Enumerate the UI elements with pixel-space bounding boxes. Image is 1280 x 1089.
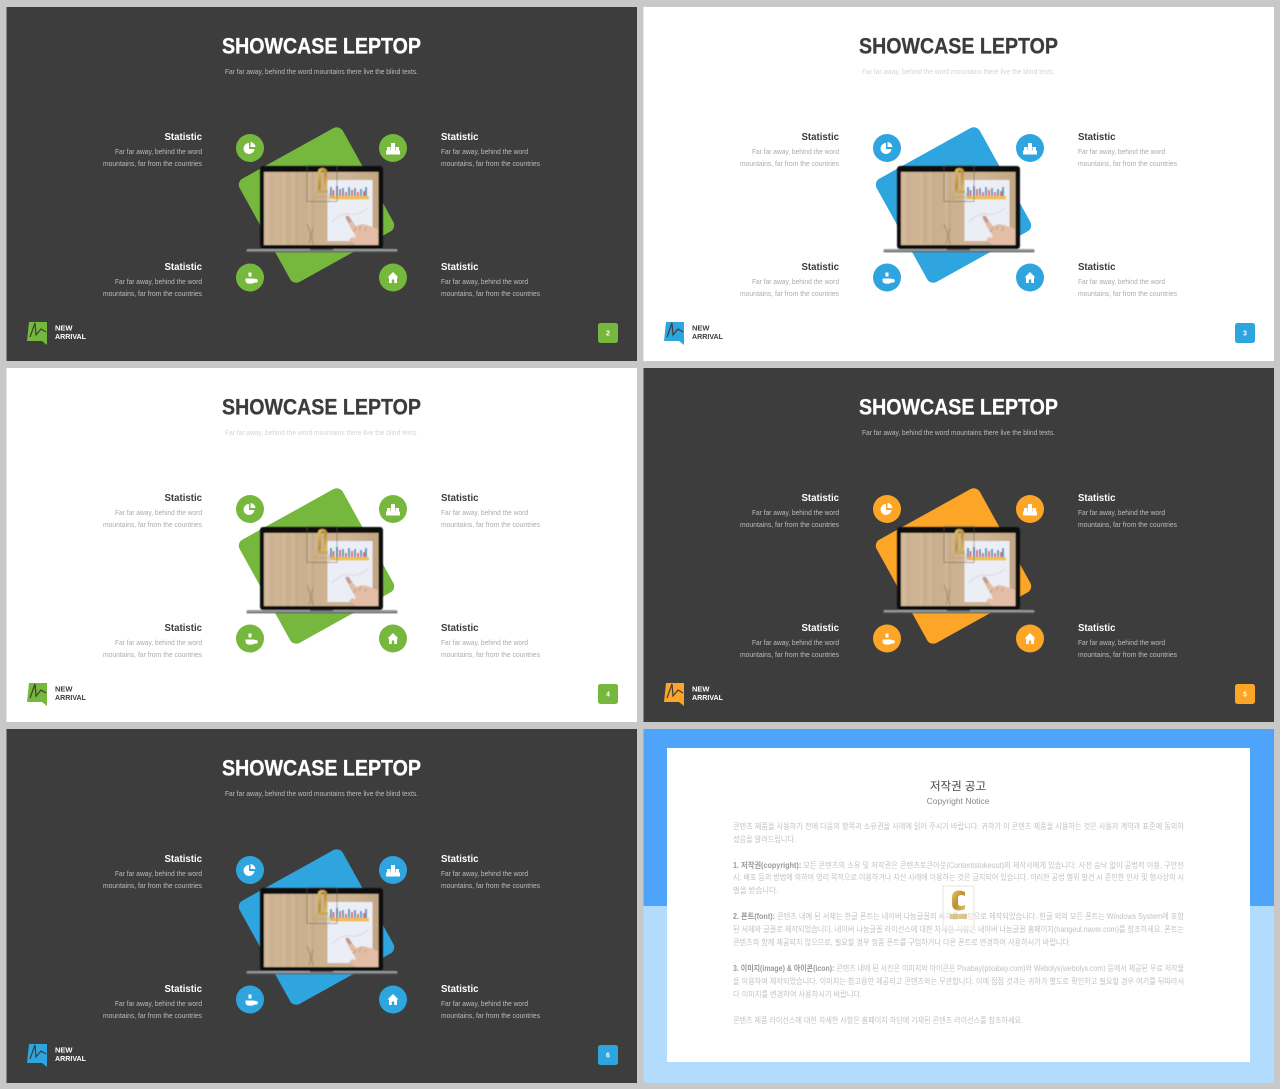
heading: copyright notice in Korean: 저작권 공고	[930, 780, 986, 793]
text block: top left statistic: Statistic	[164, 492, 202, 504]
text block: top right statistic: mountains, far from the countries	[1078, 522, 1177, 529]
panel: slide 4 white green	[6, 368, 637, 722]
subtitle: Far far away, behind the word mountains there live the blind texts.	[225, 791, 418, 798]
laptop image	[246, 526, 398, 613]
text block: image and icon clause: 다 이미지를 변경하여 사용하시기 바랍니다.	[733, 989, 862, 999]
text block: top left statistic: Far far away, behind the word	[115, 510, 202, 517]
text block: top right statistic: Statistic	[441, 492, 479, 504]
text block: bottom right statistic: Statistic	[441, 983, 479, 995]
text block: top left statistic: Far far away, behind the word	[752, 149, 839, 156]
page number: 2	[606, 330, 610, 338]
text block: license footer: 콘텐츠 제품 라이선스에 대한 자세한 사항은 홈페이지 하단에 기재된 콘텐츠 라이선스를 참조하세요.	[733, 1015, 1023, 1025]
logo	[27, 322, 86, 345]
logo: NEW	[55, 1046, 73, 1054]
text block: top left statistic: mountains, far from the countries	[103, 883, 202, 890]
watermark: gold C badge	[943, 886, 974, 930]
icon: home	[1016, 624, 1044, 652]
text block: bottom right statistic: mountains, far from the countries	[1078, 291, 1177, 298]
icon: coffee cup	[873, 264, 901, 292]
page number: 6	[606, 1052, 610, 1060]
text block: top left statistic: Statistic	[164, 131, 202, 143]
text block: copyright clause: 벌을 받습니다.	[733, 885, 778, 895]
text block: top left statistic	[103, 853, 202, 890]
text block: bottom left statistic: mountains, far from the countries	[103, 1013, 202, 1020]
text block: bottom left statistic: Far far away, behind the word	[115, 640, 202, 647]
text block: top right statistic: Far far away, behind the word	[441, 149, 528, 156]
page number	[1235, 684, 1255, 704]
icon: pie chart	[873, 495, 901, 523]
text block: top right statistic: Statistic	[1078, 131, 1116, 143]
subtitle: Far far away, behind the word mountains there live the blind texts.	[225, 430, 418, 437]
text block: bottom right statistic: mountains, far from the countries	[441, 652, 540, 659]
rotated square backdrop	[236, 486, 397, 646]
laptop image	[246, 888, 398, 974]
logo: ARRIVAL	[692, 332, 723, 341]
laptop image	[246, 166, 398, 252]
icon: home	[379, 264, 407, 292]
icon: pie chart	[236, 856, 264, 884]
text block: bottom right statistic: mountains, far from the countries	[441, 291, 540, 298]
text block: top right statistic: Far far away, behind the word	[441, 510, 528, 517]
text block: copyright clause	[733, 860, 1184, 895]
logo: NEW	[55, 324, 73, 332]
text block: bottom right statistic: mountains, far from the countries	[441, 1013, 540, 1020]
text block: top right statistic: Far far away, behind the word	[1078, 510, 1165, 517]
laptop image	[884, 166, 1034, 252]
text block: top left statistic	[103, 131, 202, 168]
text block: bottom left statistic	[103, 261, 202, 298]
text block: bottom left statistic: Statistic	[802, 261, 839, 273]
icon: pie chart	[873, 134, 901, 162]
text block: bottom left statistic: mountains, far from the countries	[740, 291, 839, 298]
text block: top left statistic: mountains, far from the countries	[740, 522, 839, 529]
logo: NEW	[55, 684, 73, 694]
text block: font clause: 콘텐츠의 함께 제공되지 않으므로, 필요할 경우 정품 폰트를 구입하거나 다른 폰트로 변경하여 사용하시기 바랍니다.	[733, 937, 1071, 947]
rotated square backdrop	[873, 486, 1034, 646]
text block: bottom right statistic	[1078, 622, 1177, 659]
text block: top left statistic: mountains, far from the countries	[103, 522, 202, 529]
icon: bar chart	[379, 134, 407, 162]
text block: introduction: 콘텐츠 제품을 사용하기 전에 다음의 항목과 소유권을 사례에 읽어 주시기 바랍니다. 귀하가 이 콘텐츠 제품을 사용하는 것은 사용자 계약과 표준에 동의하	[733, 821, 1185, 831]
text block: font clause: 2. 폰트(font): 콘텐츠 내에 된 서체는 한글 폰트는 네이버 나눔글꼴의 서체를 바탕으로 제작되었습니다. 한글 외의 모든 폰트는 Windows System에 포함	[733, 911, 1185, 921]
text block: bottom left statistic: Far far away, behind the word	[115, 1001, 202, 1008]
page number: 5	[1243, 692, 1247, 698]
logo	[664, 683, 723, 706]
icon: bar chart	[379, 495, 407, 523]
text block: top left statistic	[103, 492, 202, 529]
text block: image and icon clause: 을 이용하여 제작되었습니다. 이미지는 참고용만 제공되고 콘텐츠와는 무관합니다. 이에 점점 것과는 귀하가 별도로 확인하고 필요할 경우 여기를 뒤따라서	[733, 976, 1184, 986]
icon: coffee cup	[873, 624, 901, 652]
laptop image	[884, 526, 1034, 613]
subtitle: Far far away, behind the word mountains there live the blind texts.	[862, 430, 1055, 437]
text block: top left statistic: Statistic	[802, 131, 839, 143]
page number	[598, 1045, 618, 1065]
text block: bottom right statistic: Statistic	[1078, 622, 1116, 634]
text block: bottom left statistic	[740, 622, 839, 659]
text block: bottom left statistic: Statistic	[802, 622, 839, 634]
text block: bottom left statistic: Statistic	[164, 261, 202, 273]
text block: bottom left statistic: Statistic	[164, 622, 202, 634]
text block: bottom right statistic	[441, 622, 540, 659]
text block: top right statistic	[1078, 131, 1177, 168]
logo: ARRIVAL	[55, 1054, 86, 1063]
panel: slide 6 dark blue	[6, 729, 637, 1083]
text block: top right statistic	[441, 492, 540, 529]
text block: bottom right statistic: mountains, far from the countries	[1078, 652, 1177, 659]
logo	[664, 322, 723, 345]
logo: ARRIVAL	[55, 693, 86, 702]
subtitle: Far far away, behind the word mountains there live the blind texts.	[862, 69, 1055, 76]
icon: coffee cup	[236, 264, 264, 292]
text block: bottom left statistic: mountains, far from the countries	[103, 652, 202, 659]
panel: slide 2 dark green	[6, 7, 637, 361]
icon: pie chart	[236, 134, 264, 162]
text block: bottom right statistic	[441, 983, 540, 1020]
text block: copyright clause: 1. 저작권(copyright): 모든 콘텐츠의 소유 및 저작권은 콘텐츠토큰아웃(Contentstokeout)의 제작사에게 있습니다. 사전 승낙 없이 공법적 이용, 구안전	[733, 860, 1184, 870]
title: SHOWCASE LEPTOP	[222, 394, 421, 420]
text block: bottom left statistic: Far far away, behind the word	[115, 279, 202, 286]
text block: bottom left statistic: Far far away, behind the word	[752, 279, 839, 286]
text block: bottom right statistic: Far far away, behind the word	[441, 1001, 528, 1008]
text block: top right statistic: Statistic	[1078, 492, 1116, 504]
text block: bottom left statistic: Far far away, behind the word	[752, 640, 839, 647]
text block: top right statistic: Statistic	[441, 131, 479, 143]
page number	[1235, 323, 1255, 343]
text block: top right statistic	[441, 131, 540, 168]
icon: coffee cup	[236, 986, 264, 1014]
page number: 3	[1243, 330, 1247, 338]
text block: top right statistic: mountains, far from the countries	[1078, 161, 1177, 168]
text block: bottom right statistic: Statistic	[441, 261, 479, 273]
text block: top left statistic: Far far away, behind the word	[115, 871, 202, 878]
icon: pie chart	[236, 495, 264, 523]
text block: top right statistic: Far far away, behind the word	[1078, 149, 1165, 156]
subtitle: Far far away, behind the word mountains there live the blind texts.	[225, 69, 418, 76]
text block: bottom right statistic: Statistic	[441, 622, 479, 634]
text block: top left statistic	[740, 492, 839, 529]
text block: image and icon clause: 3. 이미지(image) & 아이콘(icon): 콘텐츠 내에 된 사진은 이미지와 아이콘은 Pixabay(pixabay.com)와 Webolys(webolys.com) 등에서 제공된 무료 저작물	[733, 963, 1184, 973]
text block: top left statistic	[740, 131, 839, 168]
text block: introduction: 셨음을 알려드립니다.	[733, 834, 796, 844]
text block: top right statistic: Statistic	[441, 853, 479, 865]
text block: font clause: 된 서체와 글꼴로 제작되었습니다. 네이버 나눔글꼴 라이선스에 대한 자세한 사항은 네이버 나눔글꼴 홈페이지(hangeul.naver.com)를 참조하세요. 폰트는	[733, 924, 1184, 934]
subheading: copyright notice: Copyright Notice	[927, 796, 990, 806]
text block: top left statistic: Far far away, behind the word	[752, 510, 839, 517]
page number	[598, 684, 618, 704]
icon: bar chart	[1016, 495, 1044, 523]
logo	[27, 683, 86, 706]
page number: 4	[606, 692, 610, 698]
text block: bottom right statistic	[1078, 261, 1177, 298]
text block: bottom left statistic: Statistic	[164, 983, 202, 995]
panel: copyright notice	[644, 729, 1274, 1083]
text block: top left statistic: mountains, far from the countries	[103, 161, 202, 168]
text block: bottom right statistic: Far far away, behind the word	[441, 640, 528, 647]
text block: image and icon clause	[733, 963, 1184, 999]
title: SHOWCASE LEPTOP	[859, 34, 1058, 58]
text block: bottom right statistic: Statistic	[1078, 261, 1116, 273]
icon: home	[379, 624, 407, 652]
panel: slide 5 dark orange	[644, 368, 1274, 722]
text block: font clause	[733, 911, 1185, 947]
text block: top right statistic: mountains, far from the countries	[441, 522, 540, 529]
logo: ARRIVAL	[692, 693, 723, 702]
icon: home	[1016, 264, 1044, 292]
rotated square backdrop	[236, 847, 397, 1007]
icon: home	[379, 986, 407, 1014]
title: SHOWCASE LEPTOP	[859, 394, 1058, 420]
text block: bottom right statistic: Far far away, behind the word	[1078, 279, 1165, 286]
text block: bottom left statistic	[740, 261, 839, 298]
text block: bottom right statistic	[441, 261, 540, 298]
icon: bar chart	[1016, 134, 1044, 162]
icon: bar chart	[379, 856, 407, 884]
logo	[27, 1044, 86, 1067]
text block: top left statistic: Statistic	[802, 492, 839, 504]
rotated square backdrop	[236, 125, 397, 285]
text block: top right statistic: mountains, far from the countries	[441, 161, 540, 168]
text block: bottom left statistic: mountains, far from the countries	[103, 291, 202, 298]
text block: top left statistic: Far far away, behind the word	[115, 149, 202, 156]
text block: copyright clause: 시, 배포 등의 방법에 의하여 영리 목적으로 이용하거나 자신 사례에 이용하는 것은 금지되어 있습니다. 이러한 공법 행위 발견 시 준민한 민사 및 형사상의 시	[733, 872, 1184, 882]
text block: bottom left statistic: mountains, far from the countries	[740, 652, 839, 659]
text block: bottom right statistic: Far far away, behind the word	[441, 279, 528, 286]
text block: bottom left statistic	[103, 622, 202, 659]
text block: top right statistic: Far far away, behind the word	[441, 871, 528, 878]
rotated square backdrop	[873, 125, 1034, 285]
logo: ARRIVAL	[55, 332, 86, 341]
text block: top right statistic	[1078, 492, 1177, 529]
text block: top right statistic: mountains, far from the countries	[441, 883, 540, 890]
logo: NEW	[692, 684, 710, 694]
text block: top left statistic: mountains, far from the countries	[740, 161, 839, 168]
logo: NEW	[692, 324, 710, 332]
text block: top left statistic: Statistic	[164, 853, 202, 865]
page number	[598, 323, 618, 343]
icon: coffee cup	[236, 624, 264, 652]
text block: bottom left statistic	[103, 983, 202, 1020]
title: SHOWCASE LEPTOP	[222, 756, 421, 780]
panel: slide 3 white blue	[644, 7, 1274, 361]
text block: bottom right statistic: Far far away, behind the word	[1078, 640, 1165, 647]
title: SHOWCASE LEPTOP	[222, 34, 421, 58]
text block: introduction	[733, 821, 1185, 844]
text block: top right statistic	[441, 853, 540, 890]
